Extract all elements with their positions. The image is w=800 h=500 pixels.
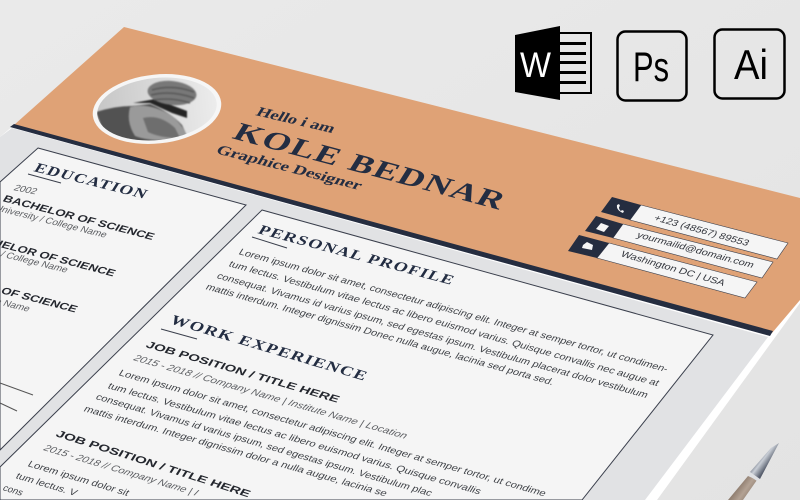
education entry 1 (0, 183, 156, 243)
orange header (14, 27, 800, 333)
job 2: Lorem ipsum dolor sit (25, 459, 132, 499)
job 2 (0, 429, 252, 500)
sheet gray body (0, 128, 768, 500)
work experience underline (161, 329, 197, 339)
job 2: cons (0, 483, 25, 498)
sheet white edge (0, 125, 800, 500)
job title: Graphice Designer (213, 143, 366, 194)
job 1: tum lectus. Vestibulum vitae lectus ac libero euismod varius. Quisque convallis (105, 381, 483, 497)
education entry 1: BACHELOR OF SCIENCE (0, 194, 156, 243)
contact rows (568, 197, 788, 298)
job 2: 2015 - 2018 // Company Name | I (40, 443, 201, 499)
work experience heading: WORK EXPERIENCE (167, 313, 371, 384)
panel: profile and experience (0, 210, 713, 500)
greeting: Hello i am (253, 105, 338, 136)
panel: education (0, 148, 246, 450)
icon: pen (728, 443, 779, 500)
address row (568, 235, 757, 298)
address row: Washington DC | USA (619, 249, 728, 288)
personal profile underline (252, 237, 287, 248)
personal profile body: tum lectus. Vestibulum vitae lectus ac libero euismod varius. Quisque convallis nec augue at (226, 259, 662, 389)
education entry 1: 2002 (11, 183, 39, 197)
personal profile body: mattis interdum. Integer dignissim Donec nulla augue, lacinia sed porta sed. (203, 282, 556, 388)
education entry 3 (0, 267, 79, 315)
icon: photoshop: Ps (633, 43, 669, 90)
job 1: JOB POSITION / TITLE HERE (143, 340, 341, 405)
icon: photoshop (618, 32, 686, 100)
icon: illustrator (714, 30, 784, 98)
education heading: EDUCATION (31, 161, 151, 202)
education panel box (0, 148, 246, 450)
email row: yourmailid@domain.com (635, 230, 757, 270)
name: KOLE BEDNAR (228, 118, 513, 215)
personal profile body: Lorem ipsum dolor sit amet, consectetur adipiscing elit. Integer at semper tortor, ut condimen- (236, 247, 670, 375)
education entry 2 (0, 231, 117, 279)
dark header band (10, 124, 773, 336)
job 1 (81, 340, 548, 499)
job 1: Lorem ipsum dolor sit amet, consectetur adipiscing elit. Integer at semper tortor, ut condime (116, 368, 548, 499)
education underline (28, 174, 61, 183)
icon: illustrator: Ai (734, 41, 768, 88)
main panel box (0, 210, 713, 500)
job 2: JOB POSITION / TITLE HERE (53, 429, 252, 500)
icon: word: W (520, 46, 551, 85)
job 1: 2015 - 2018 // Company Name | Institute Name | Location (130, 353, 409, 441)
job 1: mattis interdum. Integer dignissim dolor a nulla augue, lacinia se (81, 404, 389, 499)
phone row (601, 197, 788, 259)
job 2: tum lectus. V (13, 471, 80, 499)
name block (213, 105, 513, 215)
icon: word (515, 26, 591, 100)
personal profile body: consequat. Vivamus id varius ipsum, sed egestas ipsum. Vestibulum placerat dolor vestibulum (214, 271, 650, 401)
job 1: consequat. Vivamus id varius ipsum, sed egestas ipsum. Vestibulum plac (93, 392, 434, 499)
phone row: +123 (48567) 89553 (652, 213, 751, 248)
profile photo (92, 74, 222, 144)
personal profile heading: PERSONAL PROFILE (255, 223, 458, 288)
personal profile body (203, 247, 670, 401)
email row (585, 216, 773, 278)
